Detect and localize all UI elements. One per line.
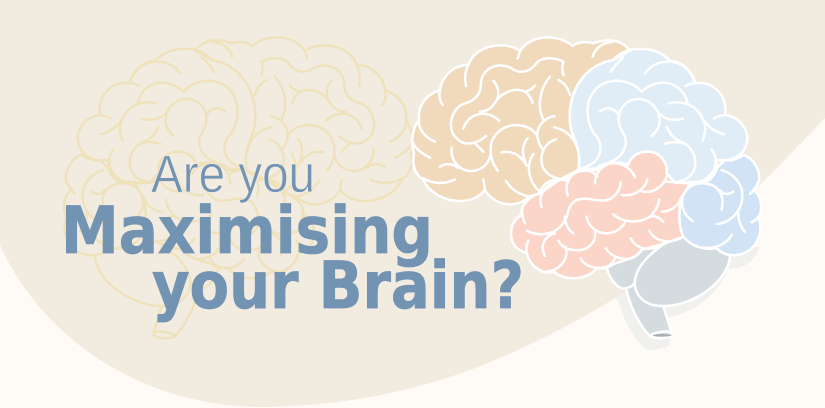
cerebellum and brain stem [607,237,730,337]
parietal lobe [570,49,747,183]
occipital lobe [679,155,761,255]
brain fold lines [412,37,761,338]
title line: Maximising: Maximising [61,194,433,269]
frontal lobe [412,37,630,204]
title line: your Brain?: your Brain? [152,249,524,324]
brain stem opening [653,334,672,337]
title line: Are you: Are you [151,145,315,204]
temporal lobe [511,152,690,278]
ghost brain outline [64,37,413,338]
coloured brain illustration [412,37,761,350]
title [61,145,524,324]
brain drop shadow [613,247,759,350]
